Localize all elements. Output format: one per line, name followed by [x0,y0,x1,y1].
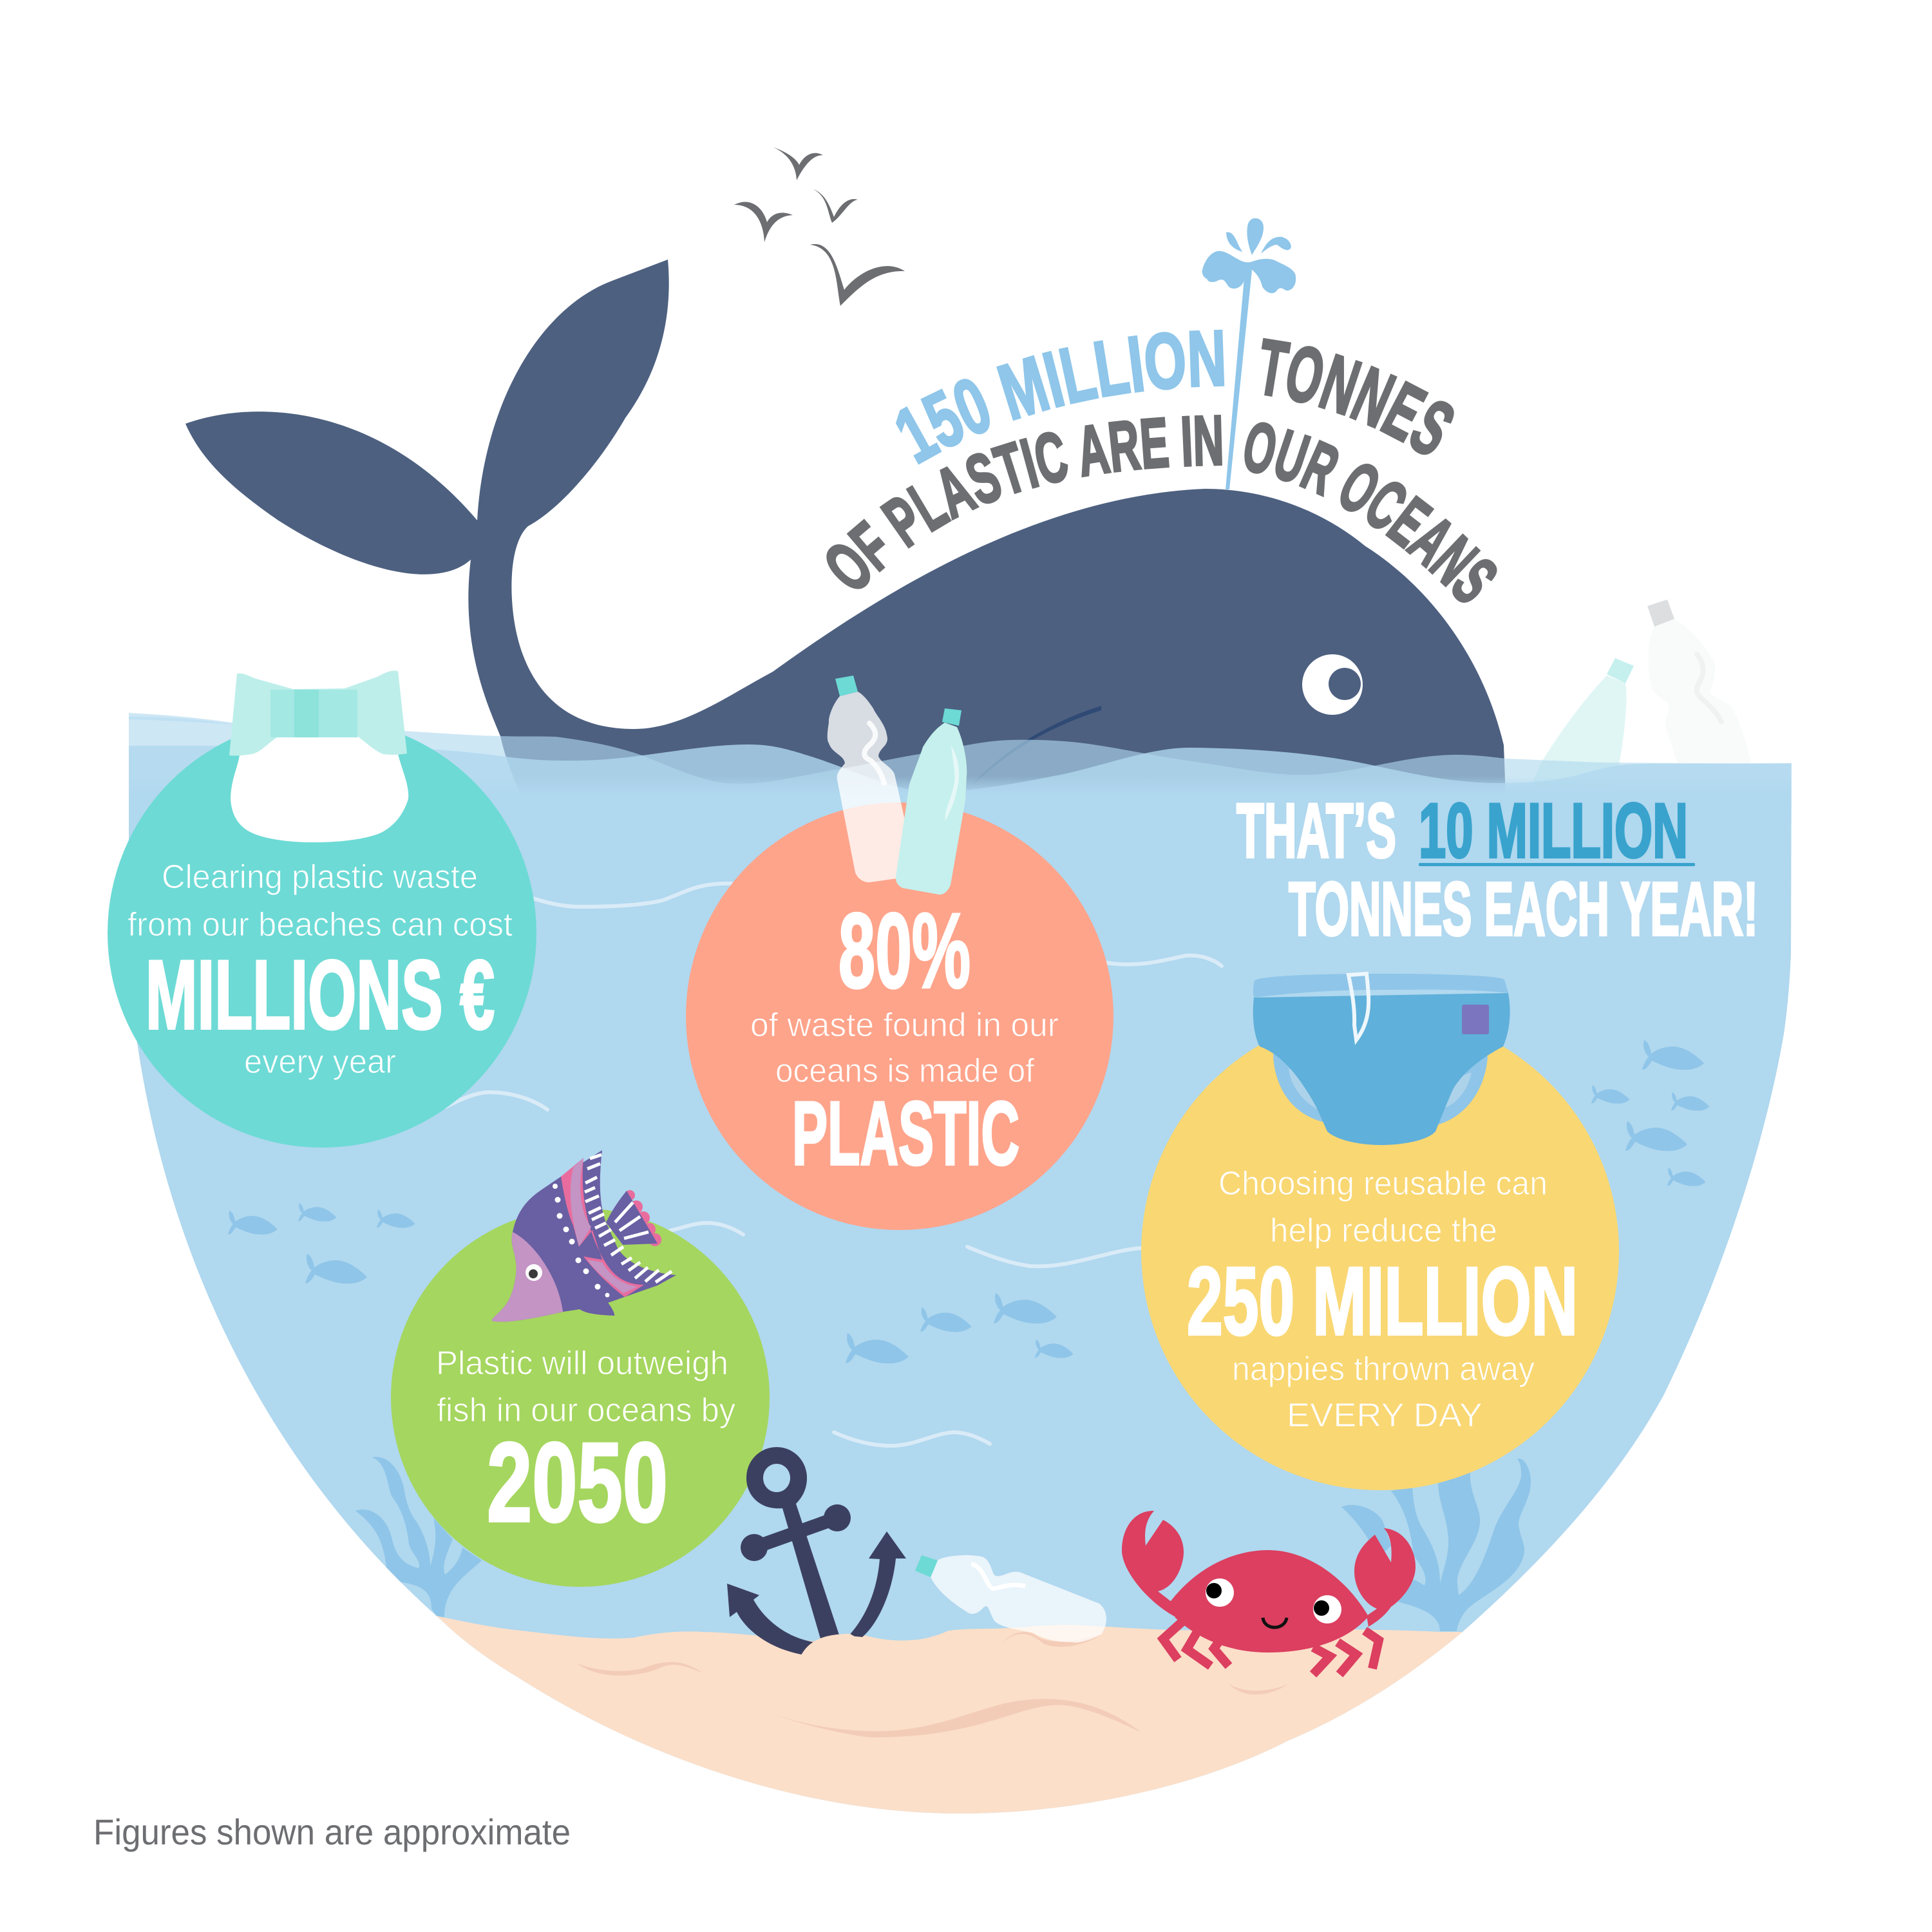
title: 150 million tonnes of plastic are in our oceans: OF PLASTIC ARE IN [826,415,1222,589]
title: 150 million tonnes of plastic are in our oceans: OUR OCEANS [1244,422,1497,603]
sand ripples [577,1632,1288,1738]
whale mouth line [968,706,1101,790]
text: 80 percent: oceans is made of [775,1052,1035,1090]
whale spout [1202,218,1296,489]
panel: plastic outweigh fish [391,1150,770,1587]
text: clearing plastic [128,858,513,1081]
icon: angelfish [492,1150,676,1322]
anchor [727,1447,906,1668]
water ripples [445,884,1222,1446]
front wave [129,744,1792,811]
title: 150 million tonnes of plastic are in our oceans: 150 MILLION [896,330,1225,465]
ocean and sand bowl [122,713,1797,1868]
text: nappies: Choosing reusable can [1218,1165,1548,1202]
text: outweigh: 2050 [487,1420,668,1546]
fish school left [228,1203,415,1283]
headline: that's 10 million tonnes each year [1236,788,1758,952]
text: outweigh [436,1345,735,1546]
crab right claw [1354,1528,1416,1627]
text: nappies: help reduce the [1270,1212,1497,1249]
crab [1122,1511,1416,1674]
left seaweed [355,1457,482,1620]
icon: white bag with bow [229,670,408,842]
text: clearing plastic: Clearing plastic waste [162,858,478,896]
text: clearing plastic: from our beaches can cost [128,906,513,943]
text: nappies: EVERY DAY [1287,1397,1482,1434]
fish school centre [846,1293,1074,1363]
footnote: Figures shown are approximate [93,1812,571,1852]
fish school right [1591,1040,1710,1186]
text: clearing plastic: every year [244,1043,396,1081]
crab left claw [1122,1511,1184,1619]
text: 80 percent: of waste found in our [750,1007,1059,1044]
background bottles behind the water [1531,600,1752,787]
panel: reusable nappies [1141,974,1619,1490]
water surface streak [129,717,235,724]
back wave [129,713,1792,793]
icon: nappy [1253,974,1510,1145]
crab eyes [1206,1578,1341,1624]
whale [185,260,1506,796]
water body [122,773,1797,1829]
text: outweigh: fish in our oceans by [437,1392,735,1429]
right seaweed [1341,1459,1531,1631]
headline: that's 10 million tonnes each year: THAT’S [1236,788,1396,874]
plastic bottle on sand [915,1555,1106,1642]
crab legs [1163,1621,1379,1674]
panel: 80 percent plastic [686,676,1113,1230]
sand [437,1616,1463,1814]
title: 150 million tonnes of plastic are in our oceans: TONNES [1261,337,1454,455]
text: clearing plastic: MILLIONS € [146,940,495,1050]
text: 80 percent [750,891,1059,1184]
crab smile [1263,1618,1287,1627]
text: nappies: 250 MILLION [1187,1247,1578,1355]
panel: beach cleaning cost [108,670,536,1148]
headline: that's 10 million tonnes each year: 10 MILLION [1419,788,1688,874]
text: outweigh: Plastic will outweigh [436,1345,728,1382]
text: 80 percent: PLASTIC [792,1083,1019,1184]
text: nappies [1187,1165,1578,1434]
icon: upright bottle [896,708,967,895]
whale eye [1302,654,1363,715]
text: 80 percent: 80% [838,891,971,1010]
text: nappies: nappies thrown away [1232,1350,1535,1388]
title: 150 million tonnes of plastic are in our oceans [826,330,1497,603]
birds [734,147,905,306]
icon: crumpled bottle [828,676,914,882]
